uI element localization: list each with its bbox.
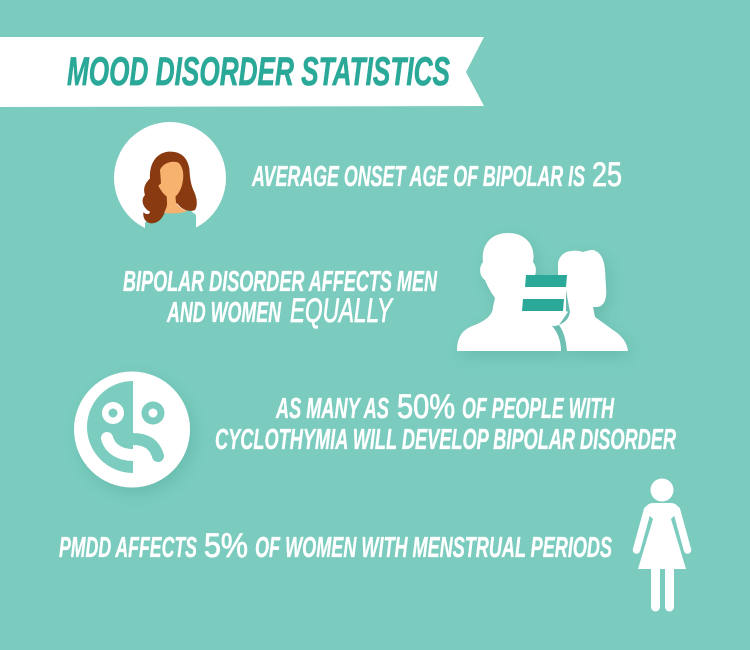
stat: PMDD	[59, 527, 612, 565]
stat: men and women equally	[123, 266, 438, 330]
icon: woman figure	[636, 478, 688, 612]
stat: PMDD: PMDD AFFECTS	[59, 532, 197, 564]
title banner	[0, 37, 484, 107]
stat: PMDD: 5%	[204, 527, 248, 565]
stat: cyclothymia: AS MANY AS	[275, 393, 389, 425]
woman silhouette	[558, 250, 628, 351]
icon: half smiling half sad face	[74, 372, 190, 488]
icon: man and woman silhouettes with equal sign	[457, 233, 628, 351]
stat: cyclothymia: 50%	[397, 388, 455, 426]
stat: average onset age	[251, 156, 622, 194]
stat: men and women equally: BIPOLAR DISORDER AFFECTS MEN	[123, 266, 438, 298]
icon: woman portrait	[114, 122, 226, 240]
stat: cyclothymia: OF PEOPLE WITH	[462, 393, 615, 425]
title: MOOD DISORDER STATISTICS	[67, 50, 450, 94]
stat: average onset age: 25	[592, 156, 622, 194]
stat: cyclothymia	[215, 388, 676, 456]
equal sign	[522, 275, 567, 311]
man silhouette	[457, 233, 561, 351]
stat: men and women equally: AND WOMEN	[166, 297, 282, 329]
stat: men and women equally: EQUALLY	[290, 292, 394, 330]
